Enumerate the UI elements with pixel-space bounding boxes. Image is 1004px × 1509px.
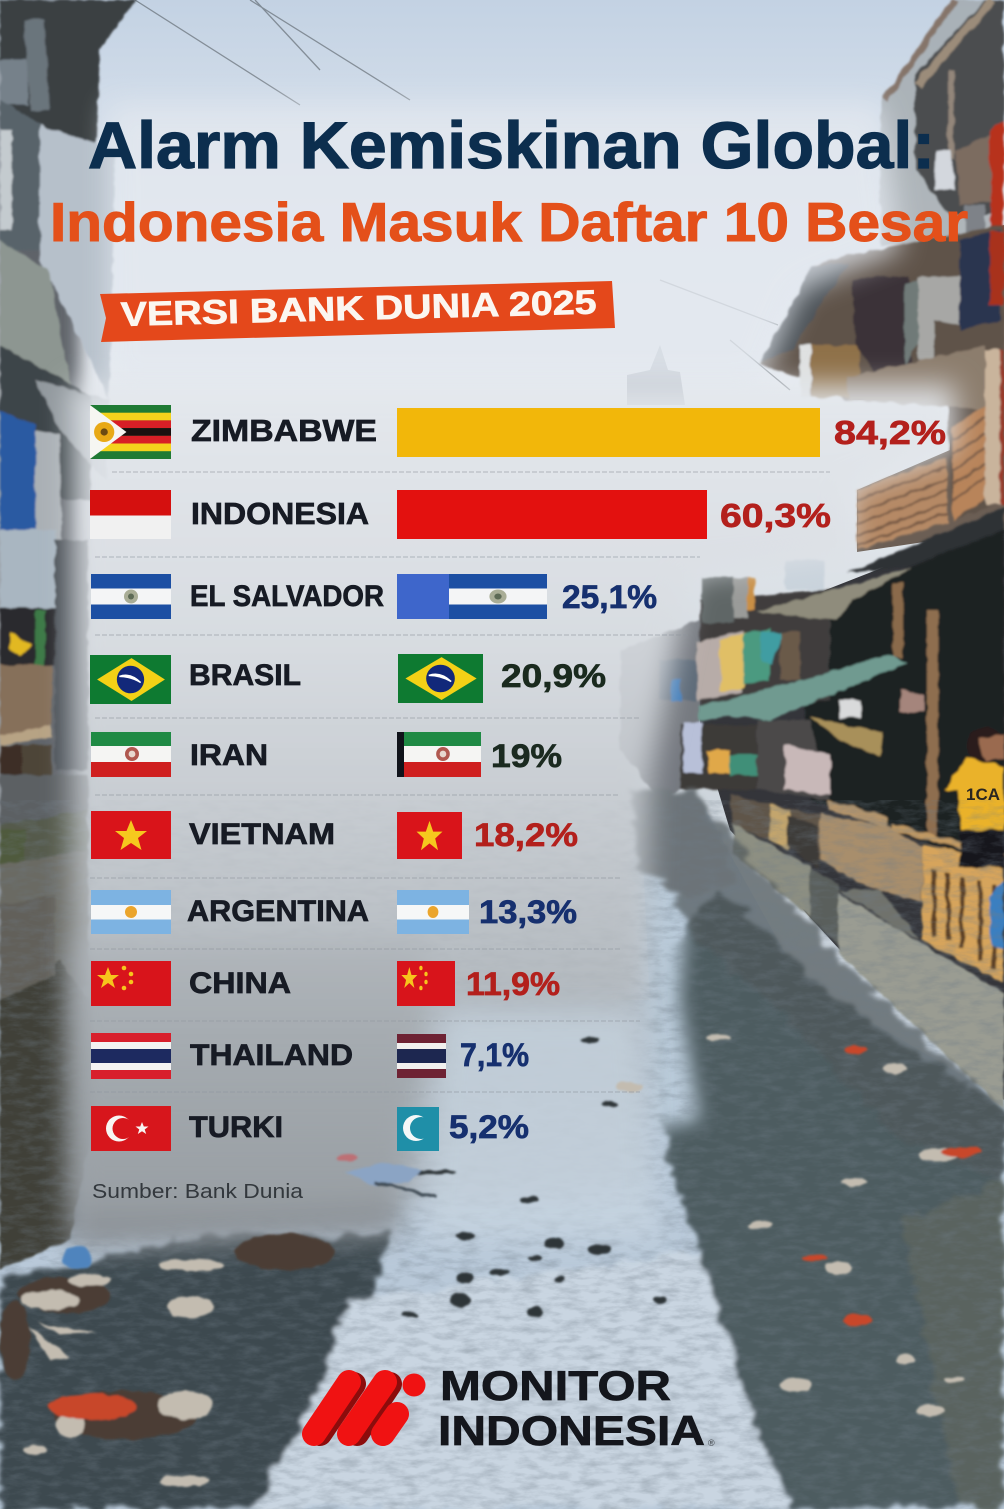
- debris along the canal wall: [630, 790, 1004, 1180]
- row: Thailand: [91, 1033, 529, 1079]
- water debris: [0, 1035, 980, 1487]
- row: Iran: IRAN: [190, 739, 268, 772]
- logo: Monitor Indonesia: [314, 1362, 715, 1454]
- row: Argentina: ARGENTINA: [187, 895, 369, 928]
- row: Turki: TURKI: [189, 1111, 283, 1144]
- row: Argentina: 13,3%: [479, 894, 577, 930]
- water and canal base: [0, 800, 1004, 1509]
- distant tower: [627, 345, 685, 405]
- title: [50, 108, 968, 253]
- title: Alarm Kemiskinan Global:: [88, 108, 935, 182]
- row: Indonesia: INDONESIA: [191, 496, 369, 531]
- row: Turki: 5,2%: [449, 1109, 529, 1145]
- row: Indonesia: 60,3%: [720, 497, 831, 534]
- logo: Monitor Indonesia: INDONESIA: [438, 1407, 705, 1454]
- row: Argentina: [91, 890, 577, 934]
- row: Brasil: BRASIL: [189, 659, 301, 692]
- shirt lettering: 1CA: [966, 785, 1000, 804]
- row: Indonesia: [90, 490, 831, 539]
- overhead wires: [135, 0, 790, 390]
- row: El Salvador: [91, 574, 657, 619]
- row: Vietnam: [91, 811, 578, 859]
- fog behind the title: [110, 105, 900, 385]
- grey shading under the fog: [70, 940, 430, 1250]
- water texture: [0, 800, 1004, 1509]
- row: China: CHINA: [189, 967, 291, 1000]
- row: Thailand: THAILAND: [190, 1039, 353, 1072]
- row: Iran: [91, 732, 562, 777]
- row: Iran: 19%: [491, 738, 562, 774]
- row: Brasil: 20,9%: [501, 658, 606, 694]
- row: China: [91, 961, 560, 1006]
- right buildings upper: [760, 225, 1004, 573]
- row: Zimbabwe: [90, 405, 946, 459]
- banner: versi bank dunia: VERSI BANK DUNIA 2025: [120, 284, 597, 334]
- row: Vietnam: VIETNAM: [189, 818, 335, 851]
- row: El Salvador: 25,1%: [562, 579, 657, 615]
- row: El Salvador: EL SALVADOR: [190, 580, 384, 613]
- bright water inside panel: [420, 1010, 660, 1240]
- row: Zimbabwe: 84,2%: [834, 414, 946, 451]
- top right building: [880, 0, 1004, 260]
- fog panel behind the chart: [72, 385, 955, 1230]
- row: Thailand: 7,1%: [460, 1037, 529, 1073]
- logo: Monitor Indonesia: ®: [708, 1438, 715, 1448]
- row: Vietnam: 18,2%: [474, 817, 578, 853]
- row: Turki: [91, 1106, 529, 1151]
- right buildings lower: [620, 530, 1004, 1110]
- title: Indonesia Masuk Daftar 10 Besar: [50, 191, 968, 253]
- row: China: 11,9%: [466, 966, 560, 1002]
- row: Zimbabwe: ZIMBABWE: [191, 413, 377, 448]
- left buildings: [0, 0, 135, 1270]
- banner: versi bank dunia: [100, 281, 615, 342]
- row: Brasil: [90, 654, 606, 704]
- source note: Sumber: Bank Dunia: [92, 1181, 304, 1203]
- row dividers: [90, 472, 830, 1092]
- logo: Monitor Indonesia: MONITOR: [440, 1362, 671, 1409]
- logo mark: [314, 1374, 426, 1434]
